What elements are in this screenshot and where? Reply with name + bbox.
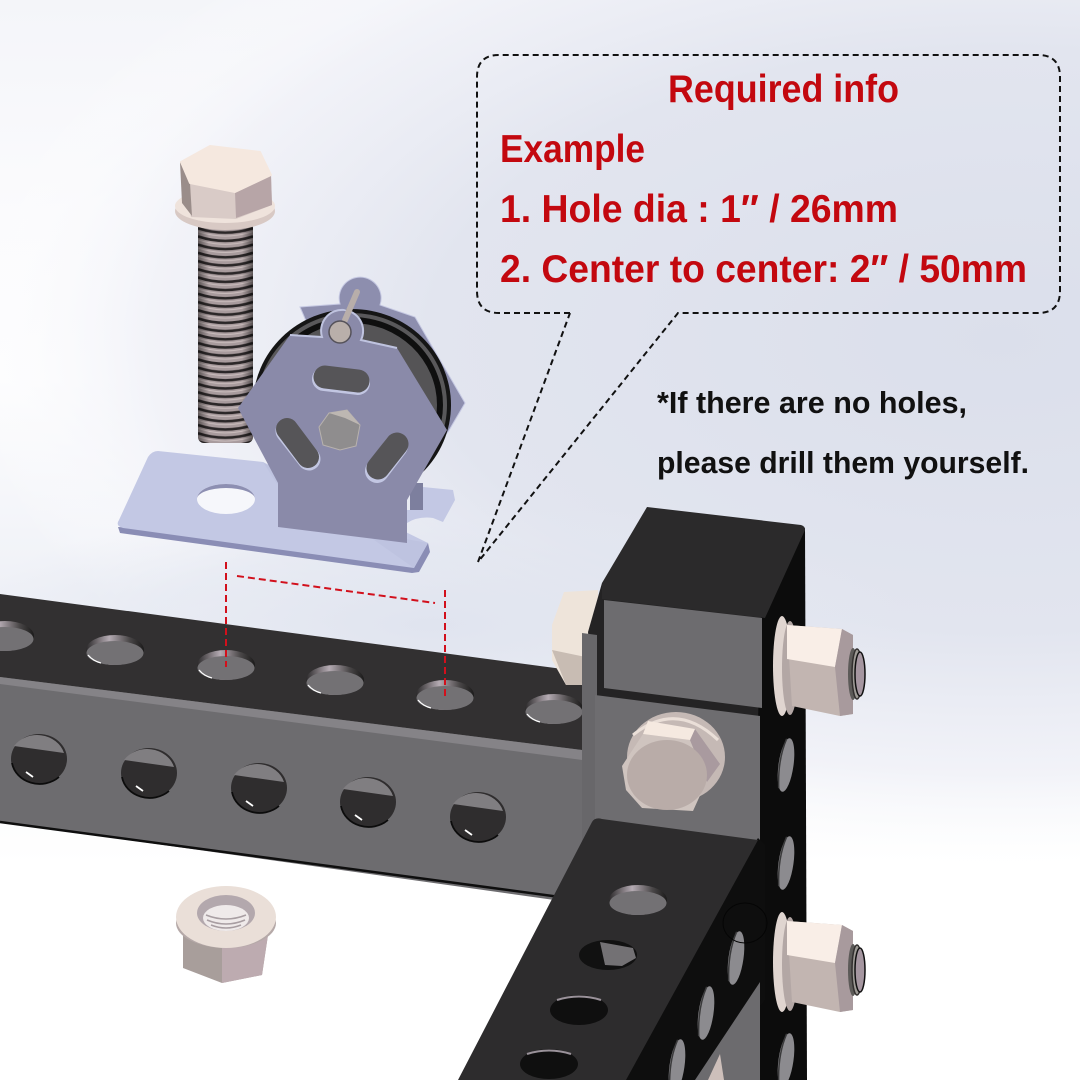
post front upper face (604, 600, 762, 708)
rear nut behind post (552, 590, 600, 685)
pulley bracket (118, 277, 465, 573)
rear mounting tab (407, 483, 455, 523)
upper right flange nut (773, 616, 865, 716)
hex head bolt (175, 146, 275, 443)
side holes on post (775, 737, 797, 1080)
note line one: *If there are no holes, (657, 385, 967, 420)
front face holes (11, 734, 506, 842)
lower rail exposed face (695, 982, 760, 1080)
back plate of pulley (300, 277, 465, 470)
lower rail side holes (666, 930, 747, 1080)
post top cap (602, 507, 805, 618)
speech bubble outline (477, 55, 1060, 562)
note line two: please drill them yourself. (657, 445, 1029, 480)
lower right flange nut (773, 912, 865, 1012)
callout heading: Required info (668, 68, 899, 111)
red dashed centre-to-centre guides (226, 562, 445, 697)
bracket plate (595, 695, 760, 845)
post right side (758, 528, 807, 1080)
corner post (458, 507, 865, 1080)
horizontal perforated rail (0, 594, 590, 905)
hole diameter line: 1. Hole dia : 1″ / 26mm (500, 188, 898, 231)
bracket hex bolt (622, 712, 725, 811)
centre distance line: 2. Center to center: 2″ / 50mm (500, 248, 1027, 291)
top face holes (0, 621, 583, 724)
pulley centre bolt (319, 410, 360, 450)
base plate (118, 451, 430, 573)
rubber wheel (253, 309, 451, 501)
post backing (588, 583, 765, 725)
callout text: required info (500, 68, 1027, 291)
bracket side strip (582, 633, 597, 850)
pulley slots (287, 377, 397, 471)
note: drilling (657, 385, 1029, 480)
lower rail top face (458, 818, 758, 1080)
pulley front plate (238, 310, 447, 543)
example label: Example (500, 128, 645, 171)
lower rail top holes (520, 885, 667, 1079)
circled detail mark (723, 903, 767, 943)
flange nut (176, 886, 276, 983)
lower rail side face (600, 838, 765, 1080)
pulley axle pin (329, 292, 357, 343)
